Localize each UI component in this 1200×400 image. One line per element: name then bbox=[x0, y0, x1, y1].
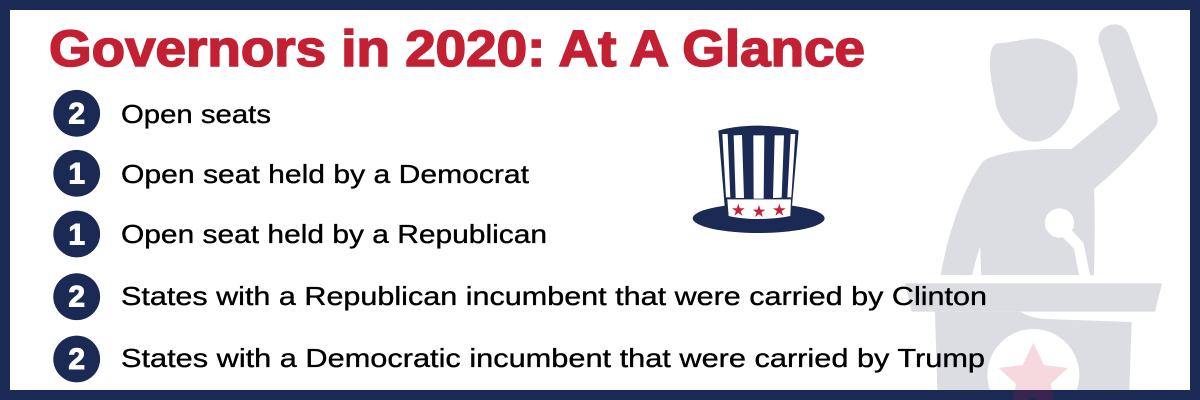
hat crown bbox=[718, 126, 799, 210]
hat brim bbox=[693, 204, 825, 233]
icon: speaker at podium silhouette bbox=[905, 24, 1162, 390]
label: States with a Democratic incumbent that were carried by Trump bbox=[121, 343, 985, 373]
number badge bbox=[53, 150, 100, 197]
number: 2 bbox=[68, 280, 85, 314]
label: Open seat held by a Democrat bbox=[121, 159, 530, 189]
list item: Republican incumbents in Clinton states bbox=[53, 273, 987, 320]
podium base bbox=[935, 312, 1132, 390]
hat band bbox=[727, 199, 791, 219]
figure body with raised arm bbox=[941, 24, 1158, 275]
hat stars bbox=[732, 204, 786, 217]
icon: Uncle Sam hat bbox=[693, 126, 825, 233]
number: 2 bbox=[68, 98, 85, 130]
list item: open seats bbox=[53, 90, 271, 137]
title: Governors in 2020: At A Glance bbox=[49, 20, 865, 77]
label: Open seats bbox=[121, 99, 271, 129]
number badge bbox=[53, 211, 100, 257]
label: States with a Republican incumbent that were carried by Clinton bbox=[121, 281, 987, 311]
figure head bbox=[990, 38, 1078, 142]
icon: faded podium star bbox=[999, 343, 1068, 400]
number: 1 bbox=[68, 218, 85, 252]
number badge bbox=[53, 336, 100, 382]
number badge bbox=[53, 90, 100, 137]
label: Open seat held by a Republican bbox=[121, 219, 547, 249]
number badge bbox=[53, 273, 100, 320]
list item: open seat held by a Republican bbox=[53, 211, 547, 257]
list item: Democratic incumbents in Trump states bbox=[53, 336, 985, 382]
number: 2 bbox=[68, 343, 85, 376]
hat stripes bbox=[722, 134, 795, 199]
podium top bbox=[905, 283, 1162, 312]
list item: open seat held by a Democrat bbox=[53, 150, 530, 197]
number: 1 bbox=[68, 158, 85, 190]
